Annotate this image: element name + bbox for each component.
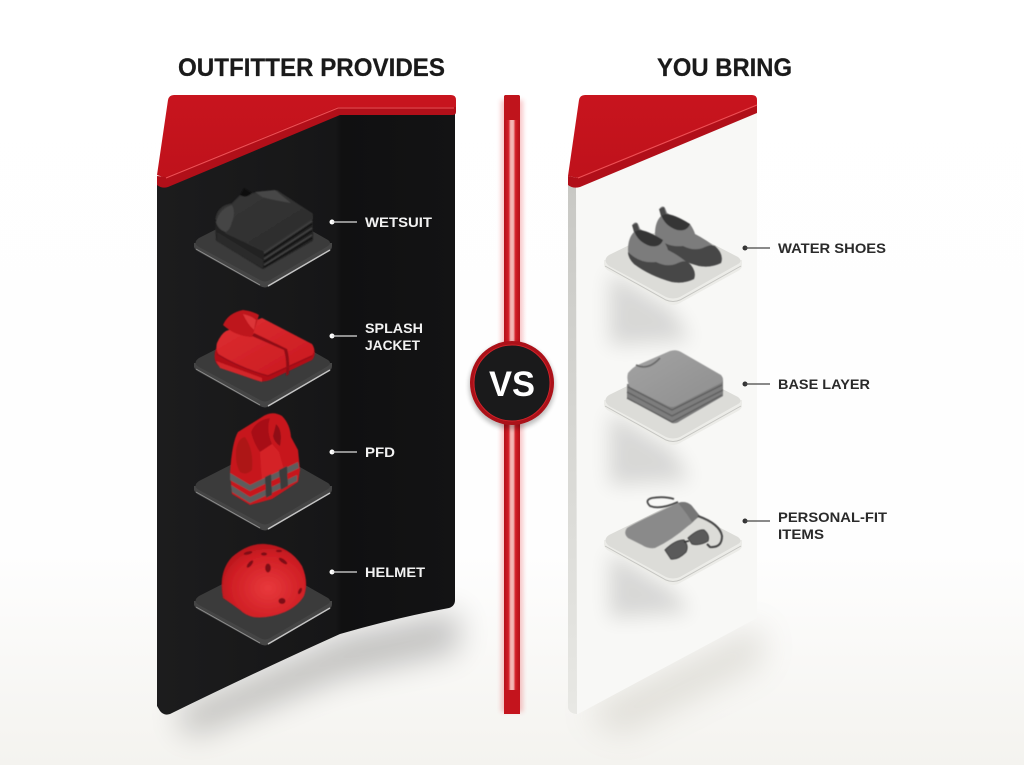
label: personal-fit items: ITEMS xyxy=(778,526,824,542)
pfd item xyxy=(194,413,395,530)
red header: right panel xyxy=(568,95,757,188)
label: splash jacket: SPLASH xyxy=(365,320,423,336)
pouch, cord and sunglasses xyxy=(625,497,722,559)
shelf xyxy=(604,365,742,445)
title: outfitter provides: OUTFITTER PROVIDES xyxy=(178,54,445,82)
label: helmet: HELMET xyxy=(365,564,425,580)
leader: personal-fit items xyxy=(742,518,770,524)
shelf shadow xyxy=(610,552,690,618)
panel: you bring xyxy=(568,95,887,735)
title: you bring: YOU BRING xyxy=(657,54,792,82)
folded wetsuit xyxy=(216,188,312,268)
leader: water shoes xyxy=(742,246,770,250)
vs divider xyxy=(469,95,555,714)
label: splash jacket: JACKET xyxy=(365,337,420,353)
shelf shadow xyxy=(610,412,690,485)
helmet item xyxy=(194,544,425,646)
red header: left panel xyxy=(157,95,456,188)
leader: splash jacket xyxy=(330,334,357,338)
folded base layer xyxy=(627,350,723,423)
label: personal-fit items: PERSONAL-FIT xyxy=(778,509,887,525)
pair of water shoes xyxy=(628,206,722,283)
folded jacket xyxy=(215,310,315,382)
label: personal-fit items xyxy=(778,509,887,542)
shelf xyxy=(194,449,332,530)
red helmet xyxy=(222,544,306,617)
label: water shoes: WATER SHOES xyxy=(778,240,886,256)
leader: base layer xyxy=(742,382,770,386)
shelf xyxy=(194,206,332,288)
leader: wetsuit xyxy=(330,220,357,224)
vs badge: VS xyxy=(489,365,535,404)
shelf shadow xyxy=(610,272,690,345)
label: splash jacket xyxy=(365,320,423,353)
personal-fit items xyxy=(604,497,887,618)
shelf xyxy=(604,505,742,585)
leader: helmet xyxy=(330,570,357,574)
shelf xyxy=(604,225,742,305)
life vest xyxy=(230,413,300,505)
shelf xyxy=(194,326,332,408)
base layer item xyxy=(604,350,870,485)
shelf xyxy=(194,564,332,646)
leader: pfd xyxy=(330,450,357,454)
label: wetsuit: WETSUIT xyxy=(365,214,432,230)
water shoes item xyxy=(604,206,886,345)
label: base layer: BASE LAYER xyxy=(778,376,870,392)
vs badge xyxy=(469,341,555,429)
label: pfd: PFD xyxy=(365,444,395,460)
splash jacket item xyxy=(194,310,423,408)
panel: outfitter provides xyxy=(157,95,458,735)
wetsuit item xyxy=(194,188,432,288)
